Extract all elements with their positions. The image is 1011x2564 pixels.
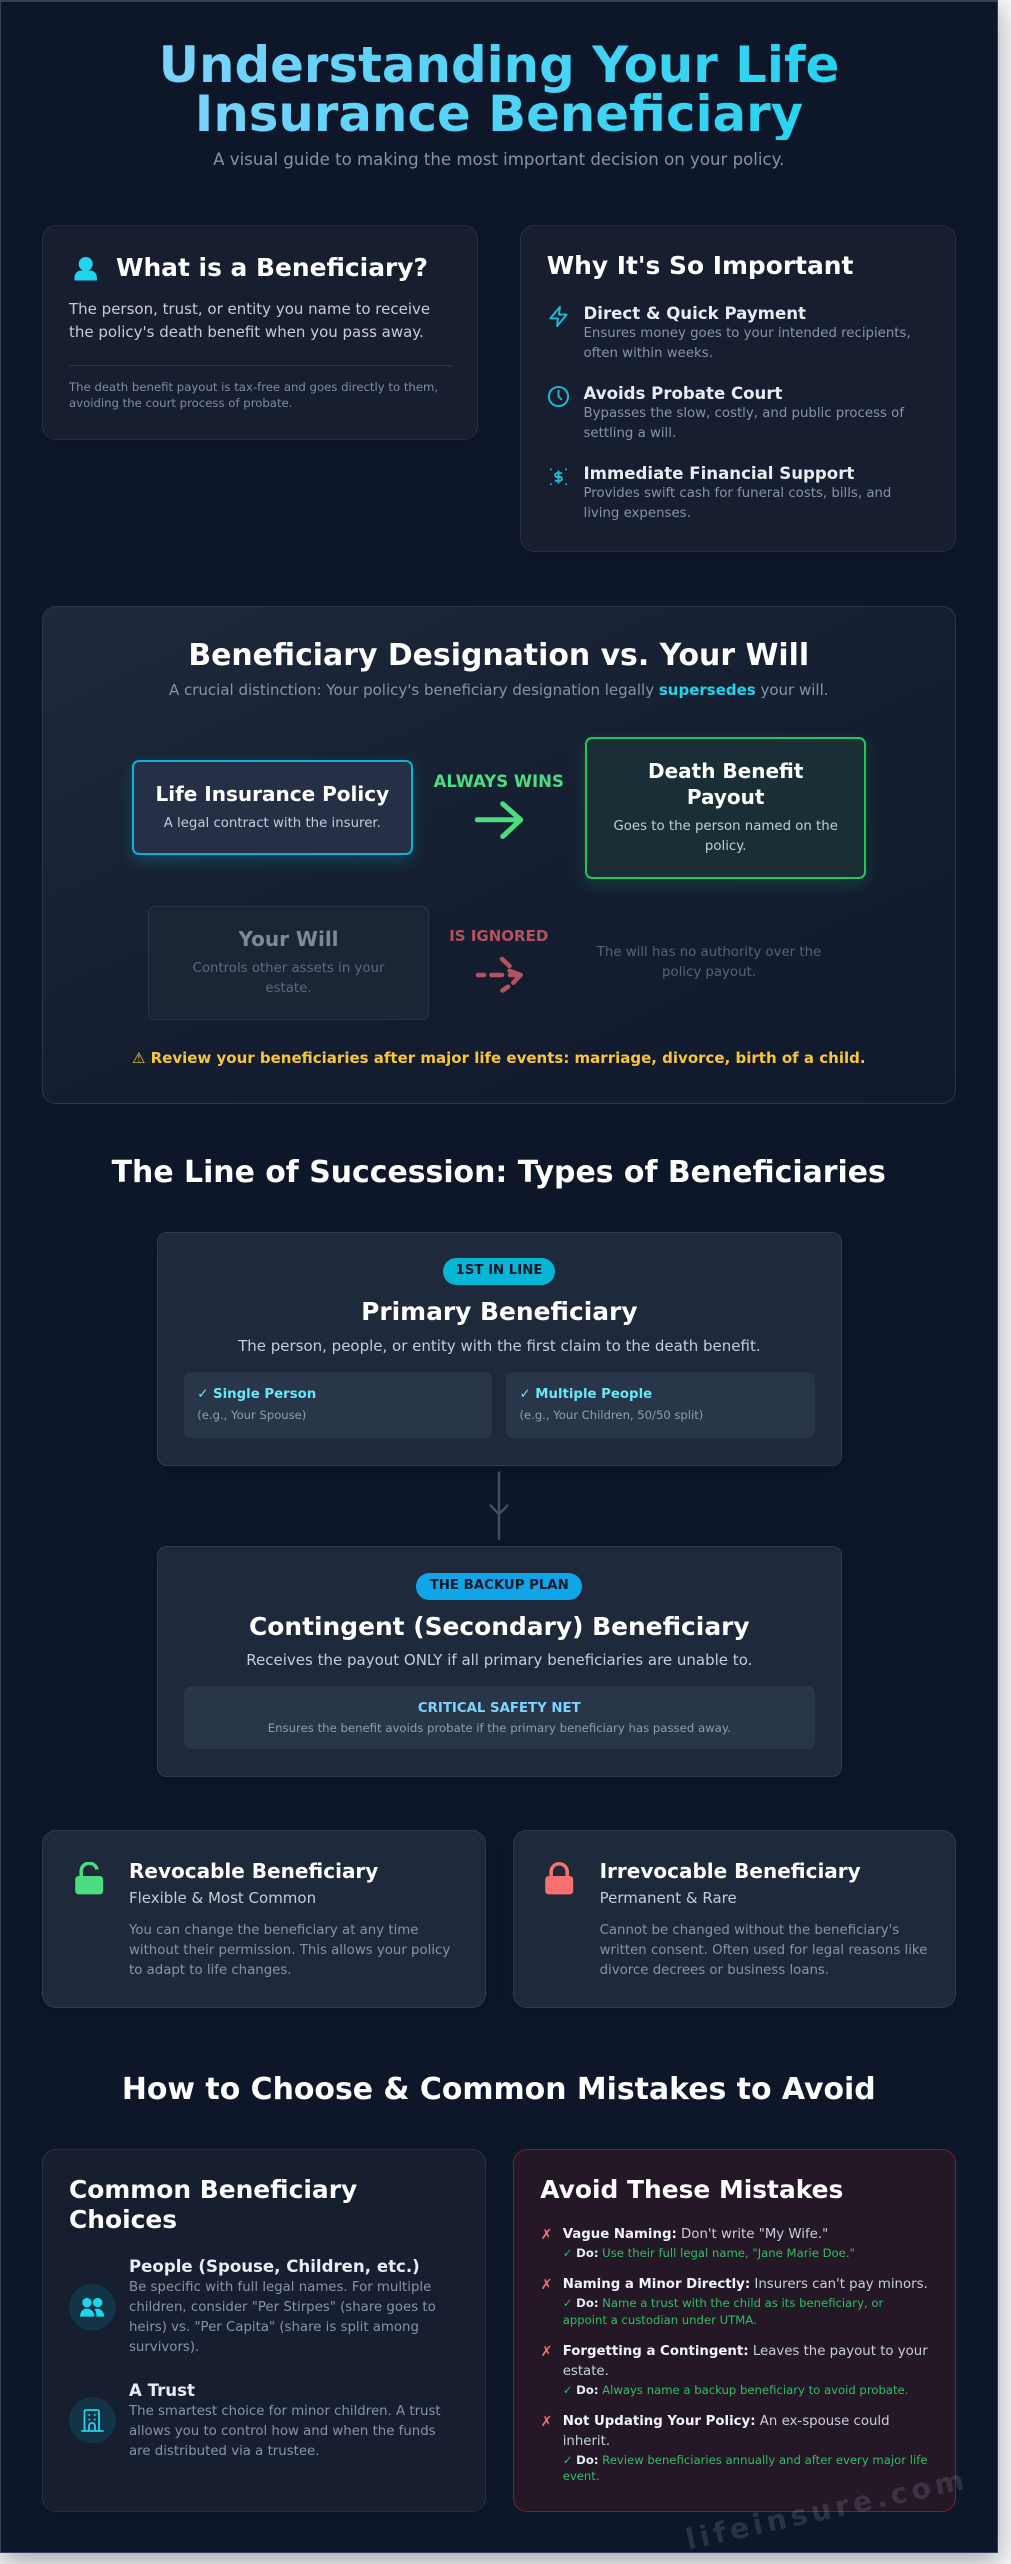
box: death benefit payout xyxy=(585,737,866,879)
choice text: heirs) vs. "Per Capita" (share is split among xyxy=(129,2320,419,2335)
mistake text: estate. xyxy=(563,2364,609,2379)
watermark: lifeinsure.com xyxy=(682,2463,971,2556)
card text xyxy=(129,1923,450,1978)
label: always wins: ALWAYS WINS xyxy=(434,772,564,790)
choice title: People (Spouse, Children, etc.) xyxy=(129,2257,420,2276)
choice text: children, consider "Per Stirpes" (share goes to xyxy=(129,2300,436,2315)
callout title: CRITICAL SAFETY NET xyxy=(418,1701,581,1716)
card subtitle: Flexible & Most Common xyxy=(129,1889,316,1907)
section heading: how to choose: How to Choose & Common Mistakes to Avoid xyxy=(122,2072,876,2107)
choice text: survivors). xyxy=(129,2340,199,2355)
badge: 1st in line: 1ST IN LINE xyxy=(456,1263,542,1278)
note: will has no authority: The will has no authority over the xyxy=(597,945,821,960)
card text: to adapt to life changes. xyxy=(129,1963,292,1978)
choice title: A Trust xyxy=(129,2381,195,2400)
panel: common beneficiary choices xyxy=(42,2149,486,2512)
box title: Death Benefit xyxy=(648,759,803,783)
card title: Primary Beneficiary xyxy=(361,1297,638,1326)
choice text: The smartest choice for minor children. A trust xyxy=(129,2404,441,2419)
cross mark: ✗ xyxy=(541,2344,552,2360)
card text: Receives the payout ONLY if all primary beneficiaries are unable to. xyxy=(246,1651,752,1669)
label: is ignored: IS IGNORED xyxy=(449,927,548,945)
mistake text: Vague Naming: Don't write "My Wife." xyxy=(563,2227,828,2242)
mistake: not updating policy xyxy=(541,2412,931,2488)
box text xyxy=(193,961,384,996)
box text xyxy=(613,819,838,854)
option: single person xyxy=(184,1372,492,1438)
box text: A legal contract with the insurer. xyxy=(164,816,381,831)
icon: person xyxy=(74,257,97,280)
arrow: solid green xyxy=(474,801,524,839)
note: will has no authority xyxy=(596,945,821,980)
item text xyxy=(584,326,911,361)
item: immediate financial support xyxy=(550,464,891,521)
item: avoids probate court xyxy=(548,384,904,441)
fix text: ✓ Do: Name a trust with the child as its beneficiary, or xyxy=(563,2296,883,2310)
card text: Cannot be changed without the beneficiary's xyxy=(600,1923,899,1938)
choice text: are distributed via a trustee. xyxy=(129,2444,319,2459)
box title: Payout xyxy=(687,785,764,809)
card text: without their permission. This allows your policy xyxy=(129,1943,450,1958)
mistake: vague naming xyxy=(541,2227,855,2260)
panel: avoid these mistakes xyxy=(513,2149,956,2512)
choice: people xyxy=(69,2257,436,2355)
item text xyxy=(584,406,904,441)
mistake: forgetting a contingent xyxy=(541,2344,928,2397)
icon: dollar sign xyxy=(550,468,568,486)
arrow: primary to contingent xyxy=(489,1472,509,1540)
heading: Avoid These Mistakes xyxy=(540,2175,843,2204)
choice text xyxy=(129,2280,436,2355)
note text: avoiding the court process of probate. xyxy=(69,396,292,410)
fix text: ✓ Do: Always name a backup beneficiary to avoid probate. xyxy=(563,2383,908,2397)
card text: The person, people, or entity with the first claim to the death benefit. xyxy=(238,1337,761,1355)
choice: a trust xyxy=(69,2381,441,2459)
box text: policy. xyxy=(705,839,746,854)
option example: (e.g., Your Children, 50/50 split) xyxy=(519,1408,703,1422)
heading xyxy=(69,2175,357,2234)
cross mark: ✗ xyxy=(541,2414,552,2430)
fix text: ✓ Do: Use their full legal name, "Jane Marie Doe." xyxy=(563,2246,855,2260)
option title: ✓ Multiple People xyxy=(519,1387,652,1402)
panel: contingent beneficiary xyxy=(157,1546,842,1777)
box title: Your Will xyxy=(238,927,339,951)
panel: revocable beneficiary xyxy=(42,1830,486,2008)
icon: people xyxy=(69,2284,116,2330)
fix text: ✓ Do: Review beneficiaries annually and after every major life xyxy=(563,2453,927,2467)
heading: What is a Beneficiary? xyxy=(116,252,428,282)
box: life insurance policy xyxy=(132,760,413,855)
item text: often within weeks. xyxy=(584,346,713,361)
badge: the backup plan xyxy=(416,1573,582,1600)
item: direct and quick payment xyxy=(549,304,911,361)
warning callout: ⚠ Review your beneficiaries after major life events: marriage, divorce, birth of a child. xyxy=(132,1049,866,1067)
heading: Why It's So Important xyxy=(547,251,853,280)
card title: Irrevocable Beneficiary xyxy=(600,1859,861,1883)
icon: open lock xyxy=(75,1862,104,1894)
badge: the backup plan: THE BACKUP PLAN xyxy=(430,1578,569,1593)
mistake text: Not Updating Your Policy: An ex-spouse could xyxy=(563,2414,890,2429)
box: your will xyxy=(148,906,429,1020)
option example: (e.g., Your Spouse) xyxy=(197,1408,306,1422)
option title: ✓ Single Person xyxy=(197,1387,316,1402)
cross mark: ✗ xyxy=(541,2277,552,2293)
note text xyxy=(69,380,438,410)
fix text: appoint a custodian under UTMA. xyxy=(563,2313,757,2327)
item text: Bypasses the slow, costly, and public process of xyxy=(584,406,904,421)
choice text: allows you to control how and when the funds xyxy=(129,2424,436,2439)
subtitle: A visual guide to making the most important decision on your policy. xyxy=(213,150,784,169)
icon: closed lock xyxy=(545,1862,574,1894)
item title: Immediate Financial Support xyxy=(584,464,854,483)
panel: irrevocable beneficiary xyxy=(513,1830,956,2008)
fix text xyxy=(563,2296,884,2327)
card text xyxy=(600,1923,927,1978)
item title: Direct & Quick Payment xyxy=(584,304,806,323)
panel: what is a beneficiary xyxy=(42,224,478,440)
fix text: event. xyxy=(563,2469,600,2483)
title: Understanding Your Life xyxy=(159,36,839,94)
mistake text: Forgetting a Contingent: Leaves the payout to your xyxy=(563,2344,928,2359)
definition text: the policy's death benefit when you pass away. xyxy=(69,323,424,341)
panel: primary beneficiary xyxy=(157,1232,842,1466)
card text: divorce decrees or business loans. xyxy=(600,1963,829,1978)
definition text: The person, trust, or entity you name to receive xyxy=(69,300,430,318)
panel: why it's so important xyxy=(520,224,956,552)
choice text: Be specific with full legal names. For multiple xyxy=(129,2280,431,2295)
box title: Life Insurance Policy xyxy=(155,782,389,806)
item text: settling a will. xyxy=(584,426,676,441)
icon: building xyxy=(69,2397,116,2443)
box text: Controls other assets in your xyxy=(193,961,384,976)
title xyxy=(149,41,849,140)
icon: clock xyxy=(548,386,569,407)
intro text: A crucial distinction: Your policy's beneficiary designation legally supersedes your will. xyxy=(169,681,829,699)
icon: lightning bolt xyxy=(549,306,568,327)
badge: 1st in line xyxy=(443,1258,555,1285)
mistake text: Naming a Minor Directly: Insurers can't pay minors. xyxy=(563,2277,928,2292)
item title: Avoids Probate Court xyxy=(584,384,782,403)
panel: beneficiary designation vs your will xyxy=(42,606,956,1104)
mistake text xyxy=(563,2412,890,2451)
heading: Common Beneficiary xyxy=(69,2175,357,2204)
box text: estate. xyxy=(265,981,312,996)
callout: critical safety net xyxy=(184,1686,815,1749)
title: Insurance Beneficiary xyxy=(195,85,803,143)
section heading: line of succession: The Line of Succession: Types of Beneficiaries xyxy=(112,1155,886,1190)
card text: written consent. Often used for legal reasons like xyxy=(600,1943,927,1958)
card title: Revocable Beneficiary xyxy=(129,1859,378,1883)
item text: Provides swift cash for funeral costs, bills, and xyxy=(584,486,891,501)
mistake text xyxy=(563,2344,928,2379)
choice text xyxy=(128,2404,441,2459)
option: multiple people xyxy=(506,1372,815,1438)
card subtitle: Permanent & Rare xyxy=(600,1889,737,1907)
mistake: naming a minor xyxy=(541,2277,928,2327)
cross mark: ✗ xyxy=(541,2227,552,2243)
card title: Contingent (Secondary) Beneficiary xyxy=(249,1612,750,1641)
definition text xyxy=(68,300,430,341)
fix text xyxy=(563,2452,927,2485)
box text: Goes to the person named on the xyxy=(613,819,838,834)
box title xyxy=(648,759,803,809)
arrow: dashed red xyxy=(476,956,523,993)
item text: living expenses. xyxy=(584,506,691,521)
card text: You can change the beneficiary at any time xyxy=(129,1923,418,1938)
heading: Choices xyxy=(69,2205,177,2234)
note text: The death benefit payout is tax-free and goes directly to them, xyxy=(69,380,438,394)
item text xyxy=(584,486,891,521)
mistake text: inherit. xyxy=(563,2434,610,2449)
heading: Beneficiary Designation vs. Your Will xyxy=(188,638,809,672)
callout text: Ensures the benefit avoids probate if the primary beneficiary has passed away. xyxy=(268,1721,731,1735)
note: will has no authority: policy payout. xyxy=(662,965,756,980)
item text: Ensures money goes to your intended recipients, xyxy=(584,326,911,341)
